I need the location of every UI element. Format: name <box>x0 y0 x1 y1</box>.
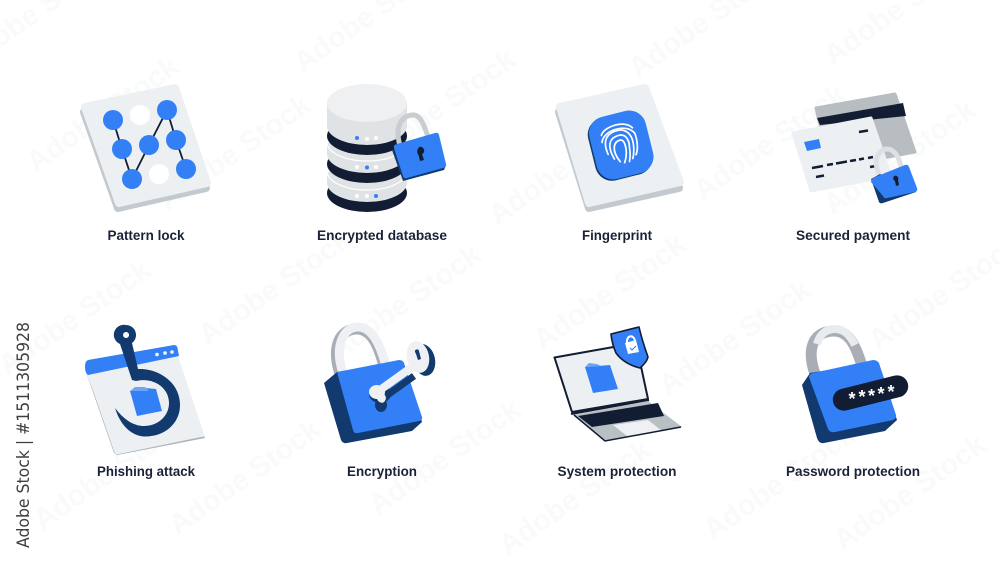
label: phishing attack: Phishing attack <box>97 464 195 479</box>
label: pattern lock: Pattern lock <box>108 228 185 243</box>
icon: password protection: * <box>887 382 895 402</box>
watermark pattern: Adobe Stock <box>193 223 357 352</box>
icon: password protection: * <box>868 386 875 406</box>
watermark pattern: Adobe Stock <box>688 78 852 207</box>
watermark pattern: Adobe Stock <box>28 408 192 537</box>
icon: password protection: * <box>877 384 885 404</box>
watermark pattern: Adobe Stock <box>358 43 522 172</box>
label: secured payment: Secured payment <box>796 228 911 243</box>
icon: password protection <box>802 329 911 443</box>
icon: password protection: * <box>848 389 856 409</box>
icon: secured payment <box>793 94 917 203</box>
watermark pattern: Adobe Stock <box>323 238 487 367</box>
watermark pattern: Adobe Stock <box>363 393 527 522</box>
watermark pattern: Adobe Stock <box>828 428 992 557</box>
label: fingerprint: Fingerprint <box>582 228 652 243</box>
icon: system protection <box>554 327 682 441</box>
icon: fingerprint <box>559 88 680 208</box>
label: encrypted database: Encrypted database <box>317 228 447 243</box>
label: system protection: System protection <box>558 464 676 479</box>
watermark pattern: Adobe Stock <box>153 88 317 217</box>
watermark pattern: Adobe Stock <box>818 93 982 222</box>
watermark pattern: Adobe Stock <box>653 273 817 402</box>
icon: phishing attack <box>85 325 205 455</box>
watermark pattern: Adobe Stock <box>528 228 692 357</box>
watermark pattern: Adobe Stock <box>21 50 185 179</box>
label: password protection: Password protection <box>786 464 920 479</box>
watermark pattern: Adobe Stock <box>483 103 647 232</box>
label: encryption: Encryption <box>347 464 417 479</box>
watermark pattern: Adobe Stock <box>698 418 862 547</box>
icon: password protection: * <box>858 387 866 407</box>
icon: encrypted database <box>327 84 446 212</box>
icon: encryption <box>324 327 438 443</box>
watermark pattern: Adobe Stock <box>163 413 327 542</box>
stock id strip: Adobe Stock | #1511305928 <box>14 322 34 548</box>
watermark pattern: Adobe Stock <box>493 433 657 562</box>
icon: pattern lock <box>84 88 207 208</box>
